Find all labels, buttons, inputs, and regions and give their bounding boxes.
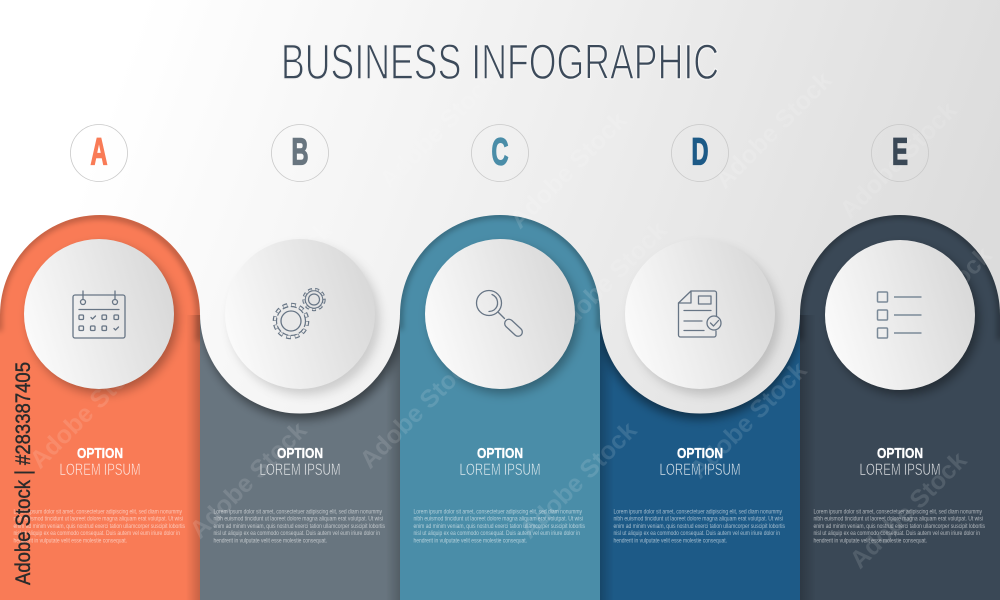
disc shadow D bbox=[630, 245, 780, 395]
disc E bbox=[825, 240, 975, 390]
icon: checklist bbox=[878, 292, 922, 338]
panel: column D band bbox=[600, 315, 800, 600]
text block: column B: nibh euismod tincidunt ut laoreet dolore magna aliquam erat volutpat. Ut wisi bbox=[214, 516, 383, 523]
text block: column E: OPTION bbox=[877, 445, 923, 462]
panel: column E arch bbox=[800, 215, 1000, 600]
text block: column C bbox=[414, 445, 586, 544]
text block: column B: LOREM IPSUM bbox=[260, 461, 340, 479]
text block: column C: LOREM IPSUM bbox=[460, 461, 540, 479]
badge E: E bbox=[892, 132, 908, 174]
backing disc: column D bbox=[600, 214, 800, 414]
badge C: C bbox=[492, 132, 508, 174]
text block: column D: hendrerit in vulputate velit esse molestie consequat. bbox=[614, 537, 727, 544]
text block: column A: nisl ut aliquip ex ea commodo consequat. Duis autem vel eum iriure dolor in bbox=[14, 530, 180, 537]
watermarks: Adobe Stock bbox=[44, 66, 172, 194]
text block: column A: LOREM IPSUM bbox=[60, 461, 140, 479]
watermarks: Adobe Stock bbox=[844, 446, 972, 574]
text block: column E: hendrerit in vulputate velit esse molestie consequat. bbox=[814, 537, 927, 544]
text block: column D: nisl ut aliquip ex ea commodo consequat. Duis autem vel eum iriure dolor in bbox=[614, 530, 780, 537]
watermarks: Adobe Stock bbox=[24, 346, 152, 474]
watermarks: Adobe Stock bbox=[209, 216, 337, 344]
disc shadow C bbox=[429, 244, 579, 394]
text block: column C: nibh euismod tincidunt ut laoreet dolore magna aliquam erat volutpat. Ut wisi bbox=[414, 516, 583, 523]
text block: column E bbox=[814, 445, 986, 544]
watermarks: Adobe Stock bbox=[544, 216, 672, 344]
disc A bbox=[24, 239, 174, 389]
text block: column C: Lorem ipsum dolor sit amet, consectetuer adipiscing elit, sed diam nonummy bbox=[414, 508, 583, 516]
badge A: A bbox=[90, 132, 108, 174]
disc D bbox=[625, 239, 775, 389]
text block: column B bbox=[214, 445, 386, 544]
watermarks: Adobe Stock bbox=[709, 66, 837, 194]
text block: column C: hendrerit in vulputate velit esse molestie consequat. bbox=[414, 537, 527, 544]
text block: column D: nibh euismod tincidunt ut laoreet dolore magna aliquam erat volutpat. Ut wisi bbox=[614, 516, 783, 523]
badge D bbox=[672, 124, 728, 182]
panel: column B band bbox=[200, 315, 400, 600]
watermarks: Adobe Stock bbox=[504, 106, 632, 234]
text block: column D bbox=[614, 445, 786, 544]
disc C bbox=[425, 239, 575, 389]
panel: column A arch bbox=[0, 215, 200, 600]
badge D: D bbox=[692, 132, 708, 174]
text block: column A: nibh euismod tincidunt ut laoreet dolore magna aliquam erat volutpat. Ut wisi bbox=[14, 516, 183, 523]
disc shadow E bbox=[829, 245, 979, 395]
watermarks: Adobe Stock bbox=[184, 416, 312, 544]
text block: column D: LOREM IPSUM bbox=[660, 461, 740, 479]
icon: magnifier bbox=[476, 290, 524, 338]
badge C bbox=[472, 124, 528, 182]
text block: column D: Lorem ipsum dolor sit amet, consectetuer adipiscing elit, sed diam nonummy bbox=[614, 508, 783, 516]
icon: gears bbox=[275, 290, 324, 337]
text block: column C: OPTION bbox=[477, 445, 523, 462]
badge B bbox=[272, 124, 328, 182]
text block: column C: nisl ut aliquip ex ea commodo consequat. Duis autem vel eum iriure dolor in bbox=[414, 530, 580, 537]
watermarks: Adobe Stock bbox=[354, 346, 482, 474]
text block: column E: LOREM IPSUM bbox=[860, 461, 940, 479]
vertical stock label: Adobe Stock | #283387405 bbox=[12, 362, 35, 585]
watermarks: Adobe Stock bbox=[169, 96, 297, 224]
title: BUSINESS INFOGRAPHIC bbox=[281, 34, 719, 90]
backing disc: column B bbox=[200, 214, 400, 414]
text block: column C: enim ad minim veniam, quis nostrud exerci tation ullamcorper suscipit lobortis bbox=[414, 523, 586, 530]
text block: column A: OPTION bbox=[77, 445, 123, 462]
text block: column B: enim ad minim veniam, quis nostrud exerci tation ullamcorper suscipit lobortis bbox=[214, 523, 386, 530]
watermarks: Adobe Stock bbox=[834, 96, 962, 224]
badge A bbox=[70, 124, 128, 182]
text block: column B: Lorem ipsum dolor sit amet, consectetuer adipiscing elit, sed diam nonummy bbox=[214, 508, 383, 516]
text block: column B: nisl ut aliquip ex ea commodo consequat. Duis autem vel eum iriure dolor in bbox=[214, 530, 380, 537]
watermarks: Adobe Stock bbox=[684, 356, 812, 484]
text block: column B: hendrerit in vulputate velit esse molestie consequat. bbox=[214, 537, 327, 544]
text block: column A: hendrerit in vulputate velit esse molestie consequat. bbox=[14, 537, 127, 544]
badge E bbox=[872, 124, 928, 182]
text block: column A: Lorem ipsum dolor sit amet, consectetuer adipiscing elit, sed diam nonummy bbox=[14, 508, 183, 516]
text block: column A bbox=[14, 445, 186, 544]
disc shadow A bbox=[28, 244, 178, 394]
watermarks: Adobe Stock bbox=[514, 416, 642, 544]
panel: column C arch bbox=[400, 215, 600, 600]
icon: document bbox=[678, 291, 721, 337]
watermarks: Adobe Stock bbox=[374, 66, 502, 194]
disc B bbox=[225, 239, 375, 389]
text block: column D: enim ad minim veniam, quis nostrud exerci tation ullamcorper suscipit lobortis bbox=[614, 523, 786, 530]
watermarks: Adobe Stock bbox=[869, 241, 997, 369]
text block: column B: OPTION bbox=[277, 445, 323, 462]
icon: calendar bbox=[73, 291, 125, 338]
text block: column D: OPTION bbox=[677, 445, 723, 462]
text block: column A: enim ad minim veniam, quis nostrud exerci tation ullamcorper suscipit lobortis bbox=[14, 523, 186, 530]
disc shadow B bbox=[230, 245, 380, 395]
badge B: B bbox=[292, 132, 308, 174]
